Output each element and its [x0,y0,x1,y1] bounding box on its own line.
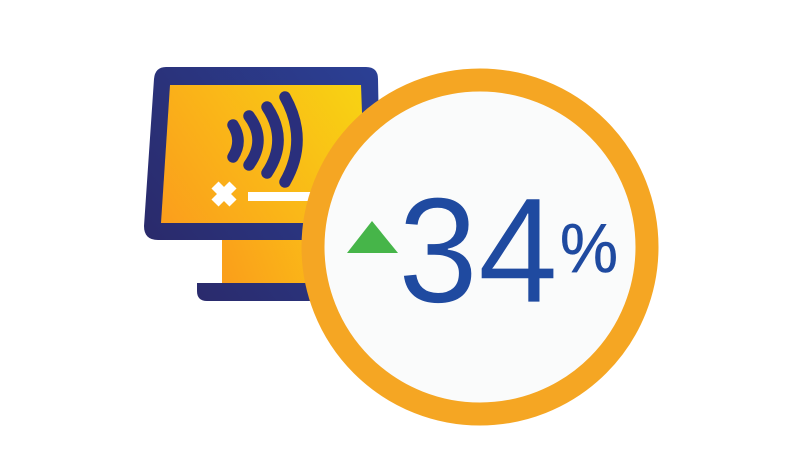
monitor screen [161,85,366,223]
stat circle [313,80,647,414]
icon: payment terminal monitor [144,67,381,301]
monitor stand [222,240,332,284]
icon: green up triangle [347,221,398,253]
stat value: 34 [398,166,558,334]
percent sign: % [560,209,618,287]
monitor base [197,283,340,301]
icon: white cross [215,185,233,203]
icon: contactless waves [233,97,297,182]
circle ring [313,80,647,414]
white line [248,192,318,201]
monitor frame [144,67,381,240]
